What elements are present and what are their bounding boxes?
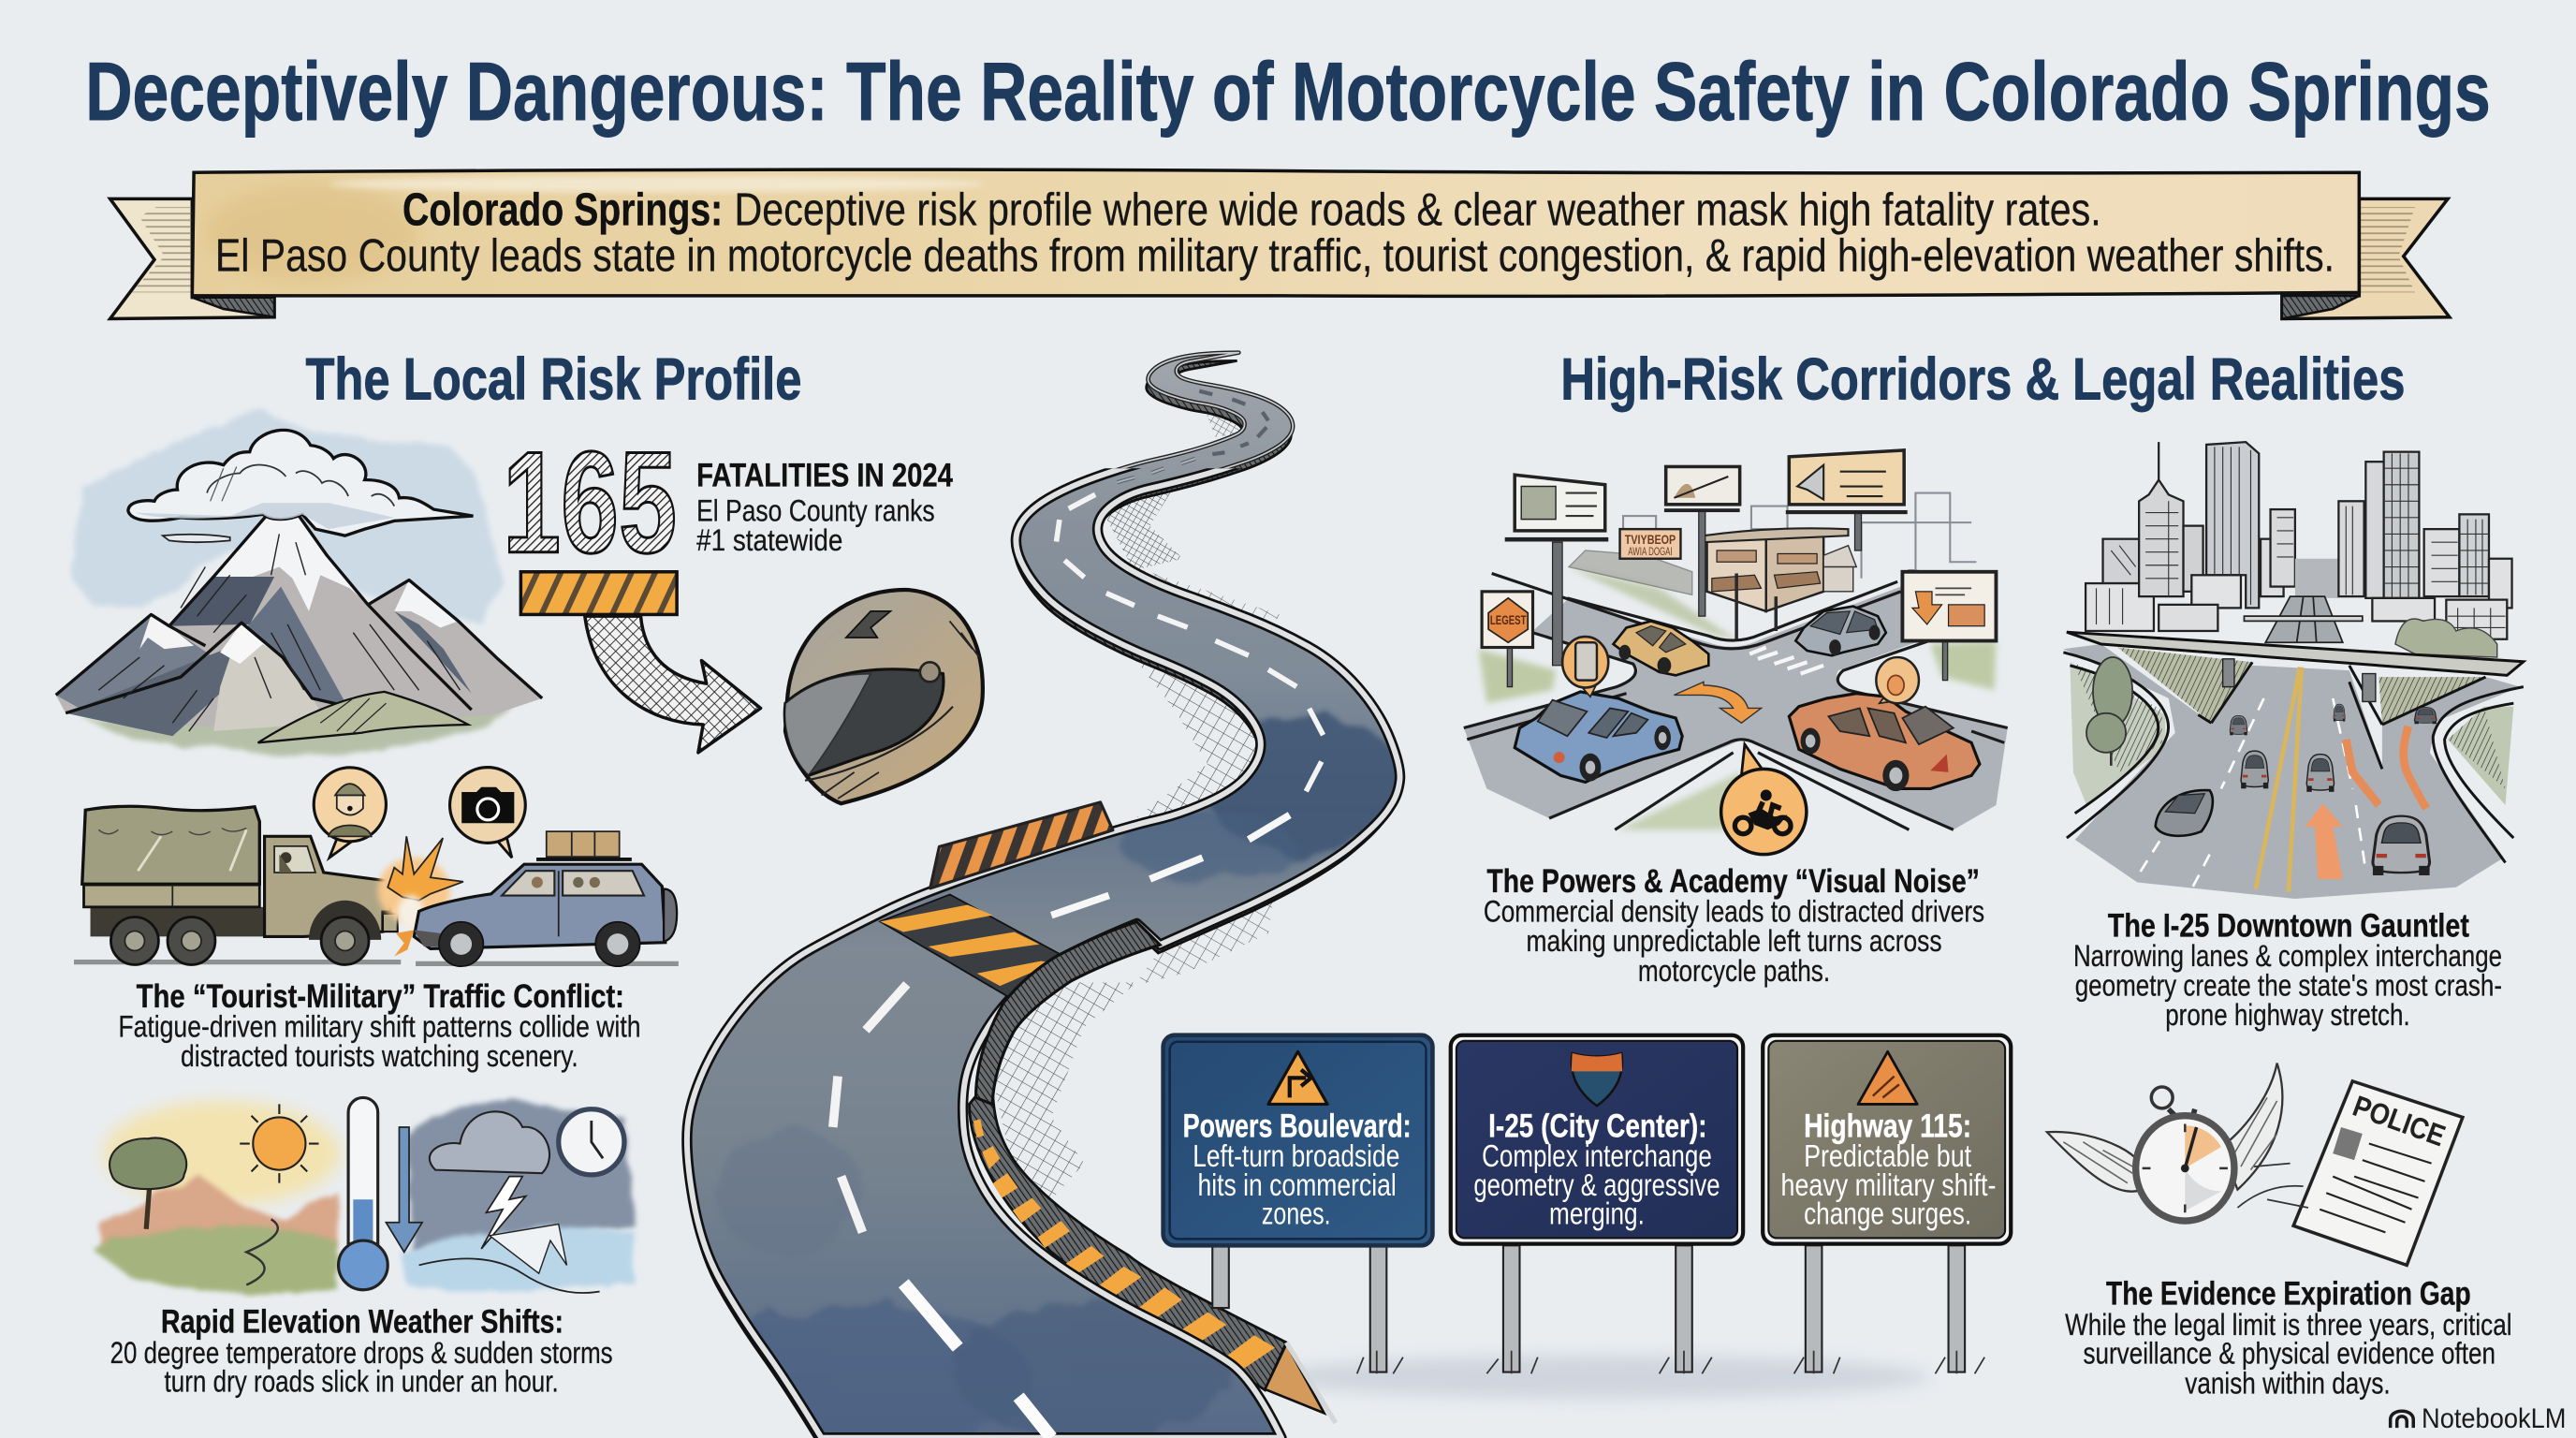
stat label: #1 statewide — [696, 523, 842, 557]
illustration: downtown skyline and highway — [2063, 442, 2524, 899]
caption: I-25 gauntlet — [2073, 907, 2502, 1032]
cars — [1515, 607, 1980, 791]
sign: I-25 City Center: merging. — [1549, 1197, 1645, 1232]
icon: weather shift scene — [92, 1097, 634, 1293]
caption: evidence expiration gap: The Evidence Expiration Gap — [2106, 1276, 2471, 1313]
curb lines — [1464, 574, 2008, 829]
highway surface — [2063, 644, 2520, 899]
lane dashes — [833, 391, 1324, 1438]
striped road crossing — [880, 894, 1061, 998]
storm panel — [401, 1101, 634, 1293]
green verges — [2070, 648, 2513, 805]
blue car — [1515, 692, 1682, 782]
stat: 165 fatalities — [503, 421, 953, 583]
window lines — [2097, 447, 2506, 638]
caption: powers and academy visual noise: The Powers & Academy “Visual Noise” — [1486, 863, 1980, 900]
icon: phone bubble — [1562, 637, 1608, 697]
storefront — [1704, 528, 1856, 611]
sign: Highway 115: change surges. — [1804, 1197, 1971, 1232]
sign: I-25 City Center: Complex interchange — [1482, 1139, 1712, 1174]
green verges — [1479, 567, 1996, 829]
tourist SUV — [414, 831, 677, 966]
sunny landscape — [92, 1101, 340, 1292]
sign: Powers Boulevard: zones. — [1262, 1197, 1331, 1232]
sign: Powers Boulevard: hits in commercial — [1197, 1168, 1397, 1203]
sign: Highway 115: Predictable but — [1804, 1139, 1972, 1174]
background buildings — [1623, 493, 1976, 601]
icon: police report — [2237, 1081, 2463, 1265]
caption: tourist-military conflict — [118, 978, 640, 1073]
icon: truck and SUV collision — [74, 768, 679, 966]
grass tufts at sign posts — [1357, 1351, 1984, 1373]
yellow car — [1614, 621, 1708, 675]
crash spark — [378, 836, 463, 956]
icon: helmet — [784, 590, 983, 803]
sign: I-25 City Center: I-25 (City Center): — [1488, 1108, 1707, 1145]
icon: motorcycle bubble — [1721, 744, 1807, 855]
icon: hazard triangle — [1858, 1051, 1917, 1104]
sign: I-25 City Center — [1451, 1035, 1743, 1372]
caption: rapid elevation weather: 20 degree temperatore drops & sudden storms — [110, 1336, 613, 1370]
lamp post and pedestrian — [1736, 574, 1776, 639]
orange weaving arrows — [2346, 726, 2426, 809]
illustration: commercial intersection — [1464, 450, 2008, 855]
caption: I-25 gauntlet: prone highway stretch. — [2165, 998, 2410, 1032]
icon: left turn warning — [1268, 1051, 1327, 1104]
main overpass — [2067, 632, 2524, 675]
heading: the local risk profile: The Local Risk Profile — [305, 346, 801, 412]
fence and hedge — [1569, 550, 1692, 594]
orange turn arrow — [1674, 682, 1761, 723]
orange car — [1789, 694, 1980, 791]
upper overpass — [2244, 616, 2363, 621]
banner text — [215, 184, 2334, 282]
sign: Highway 115: heavy military shift- — [1781, 1168, 1996, 1203]
far road lines — [2297, 596, 2317, 642]
banner: summary ribbon — [110, 169, 2450, 318]
illustration: winding road — [685, 353, 1408, 1438]
tree cluster — [2086, 657, 2132, 766]
hazard bar — [520, 572, 677, 614]
stat label: FATALITIES IN 2024 — [696, 458, 953, 494]
road hatching — [994, 409, 1284, 1199]
caption: rapid elevation weather — [110, 1303, 613, 1399]
road edge lines — [2063, 653, 2524, 862]
caption: powers and academy visual noise: making unpredictable left turns across — [1526, 924, 1942, 958]
stat label — [696, 458, 953, 557]
sign: Highway 115 — [1763, 1035, 2011, 1372]
orange up arrow — [2305, 803, 2343, 879]
overpass piers — [2223, 659, 2376, 701]
gray car — [1795, 607, 1886, 655]
orange barrier — [930, 802, 1113, 888]
sign: Powers Boulevard: Powers Boulevard: — [1183, 1108, 1412, 1145]
street surface — [1464, 587, 2008, 829]
icon: interstate shield — [1572, 1053, 1622, 1106]
storefront sign — [1620, 529, 1680, 559]
caption: tourist-military conflict: The “Tourist-Military” Traffic Conflict: — [137, 978, 624, 1015]
caption: powers and academy visual noise: motorcycle paths. — [1638, 954, 1830, 988]
icon: distraction bubble — [1876, 657, 1919, 703]
ground shadow under signs — [1273, 1356, 1930, 1399]
thermometer — [339, 1097, 388, 1290]
caption: rapid elevation weather: Rapid Elevation Weather Shifts: — [161, 1303, 564, 1340]
stat label: El Paso County ranks — [696, 493, 935, 527]
storefront sign: TVIYBEOP — [1625, 532, 1676, 547]
caption: tourist-military conflict: Fatigue-driven military shift patterns collide with — [118, 1009, 640, 1043]
sign: I-25 City Center: geometry & aggressive — [1473, 1168, 1720, 1203]
arrow to helmet — [585, 616, 761, 753]
icon: camera speech bubble — [450, 768, 525, 858]
sign: Highway 115: Highway 115: — [1804, 1108, 1971, 1145]
icon: winged stopwatch — [2047, 1064, 2282, 1221]
bushes — [2395, 619, 2497, 657]
caption: powers and academy visual noise — [1484, 863, 1984, 988]
icon: soldier speech bubble — [314, 768, 386, 858]
road surface — [687, 353, 1408, 1438]
crosswalk — [1749, 648, 1823, 674]
lane markings — [2136, 668, 2365, 896]
far highway — [2265, 596, 2343, 642]
banner text: Colorado Springs: — [402, 184, 723, 235]
sign: Powers Boulevard — [1164, 1035, 1432, 1372]
road side wall — [685, 360, 1398, 1438]
highway cars — [2156, 704, 2437, 875]
caption: I-25 gauntlet: The I-25 Downtown Gauntlet — [2108, 907, 2469, 944]
banner text: Deceptive risk profile where wide roads & clear weather mask high fatality rates. — [735, 184, 2101, 235]
army truck — [82, 806, 398, 964]
sign: Powers Boulevard: Left-turn broadside — [1193, 1139, 1399, 1174]
big number 165: 165 — [503, 421, 677, 583]
caption: powers and academy visual noise: Commercial density leads to distracted drivers — [1484, 895, 1984, 929]
caption: rapid elevation weather: turn dry roads slick in under an hour. — [165, 1365, 559, 1399]
billboards — [1482, 450, 1996, 687]
caption: evidence expiration gap: vanish within days. — [2185, 1366, 2391, 1400]
icon: mountain and storm cloud — [56, 409, 542, 756]
icon: police report: POLICE — [2349, 1089, 2450, 1152]
hatching under overpass — [2073, 648, 2506, 788]
billboards: LEGEST — [1490, 612, 1527, 627]
grey barrier wall — [976, 922, 1160, 1104]
hazard strip along road edge — [970, 1077, 1336, 1423]
skyline — [2086, 442, 2512, 639]
storefront sign: AWIA DOGAI — [1628, 545, 1673, 558]
caption: evidence expiration gap — [2065, 1276, 2512, 1400]
down arrow — [386, 1127, 422, 1252]
logo: NotebookLM: NotebookLM — [2422, 1403, 2566, 1434]
caption: tourist-military conflict: distracted tourists watching scenery. — [181, 1039, 578, 1073]
